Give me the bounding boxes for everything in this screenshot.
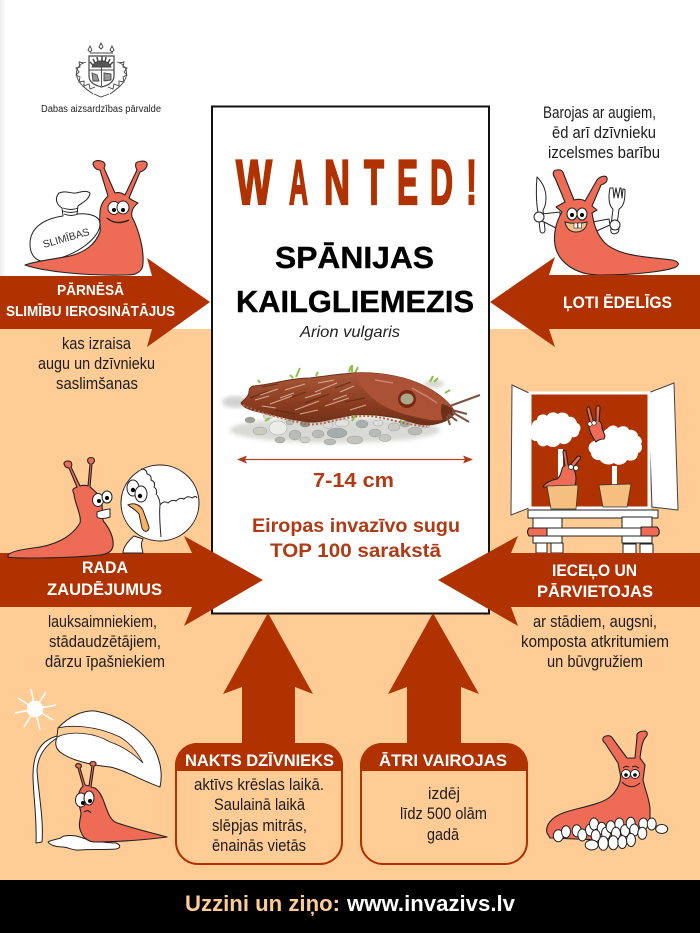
panel: ātri vairojas: gadā xyxy=(427,825,459,844)
arrow: pārnēsā slimību ierosinātājus: SLIMĪBU IEROSINĀTĀJUS xyxy=(6,303,175,320)
heading: species name: KAILGLIEMEZIS xyxy=(236,284,474,319)
text: Europe top 100: Eiropas invazīvo sugu xyxy=(252,516,460,537)
illustration: slug with knife and fork xyxy=(534,170,678,275)
heading: WANTED!: A xyxy=(289,148,308,218)
icon: knife xyxy=(536,177,546,233)
arrow: rada zaudējumus: ZAUDĒJUMUS xyxy=(47,580,162,599)
arrow: pārnēsā slimību ierosinātājus xyxy=(0,258,210,347)
arrow: ieceļo un pārvietojas xyxy=(438,536,700,626)
panel: nakts dzīvnieks: NAKTS DZĪVNIEKS xyxy=(185,751,334,770)
text: barojas ar augiem: ēd arī dzīvnieku xyxy=(552,123,656,142)
text: kas izraisa: saslimšanas xyxy=(56,374,138,393)
text: barojas ar augiem: izcelsmes barību xyxy=(548,143,660,162)
icon: leaf slit xyxy=(57,726,143,763)
panel: ātri vairojas: ĀTRI VAIROJAS xyxy=(379,751,507,770)
arrow: up right xyxy=(388,613,479,745)
panel: nakts dzīvnieks xyxy=(175,743,343,864)
arrow: rada zaudējumus: RADA xyxy=(82,559,128,577)
text: Europe top 100 xyxy=(252,516,460,562)
icon: flower pots xyxy=(547,484,631,509)
illustration: frightened slug and farmer xyxy=(8,458,199,558)
panel: wanted poster xyxy=(212,106,489,614)
text: lauksaimniekiem: dārzu īpašniekiem xyxy=(45,652,165,671)
panel: nakts dzīvnieks: ēnainās vietās xyxy=(212,836,306,855)
text: kas izraisa: augu un dzīvnieku xyxy=(38,354,155,373)
panel: nakts dzīvnieks: slēpjas mitrās, xyxy=(212,816,307,835)
text: lauksaimniekiem: stādaudzētājiem, xyxy=(49,632,161,651)
logo: coat of arms and agency name xyxy=(41,43,161,115)
heading: WANTED!: W xyxy=(236,148,272,218)
illustration: slug photo xyxy=(222,365,480,445)
icon: stem xyxy=(33,736,57,843)
footer bar: Uzzini un ziņo: xyxy=(185,891,340,916)
text: ar stādiem xyxy=(521,612,669,671)
illustration: sun, leaf and hiding slug xyxy=(15,689,167,850)
text: barojas ar augiem xyxy=(543,103,660,162)
icon: upper small slug xyxy=(587,406,605,442)
heading: WANTED!: D xyxy=(430,148,453,218)
text: Europe top 100: TOP 100 sarakstā xyxy=(270,541,441,562)
panel: ātri vairojas: līdz 500 olām xyxy=(400,804,487,823)
heading: WANTED!: ! xyxy=(466,148,477,218)
text: ar stādiem: un būvgružiem xyxy=(547,652,643,671)
arrow: ļoti ēdelīgs: ĻOTI ĒDELĪGS xyxy=(563,293,672,312)
illustration: truck with plants and slugs xyxy=(511,383,678,554)
icon: arms xyxy=(542,212,610,233)
panel: ātri vairojas xyxy=(360,743,528,864)
arrow: up left xyxy=(223,613,313,745)
text: size: 7-14 cm xyxy=(313,470,394,492)
heading: species name: SPĀNIJAS xyxy=(275,240,434,275)
heading: species name xyxy=(236,240,474,319)
panel: nakts dzīvnieks: aktīvs krēslas laikā. xyxy=(194,775,324,794)
text: ar stādiem: komposta atkritumiem xyxy=(521,632,669,651)
panel: ātri vairojas: izdēj xyxy=(428,784,460,803)
heading: WANTED!: T xyxy=(364,148,384,218)
footer bar xyxy=(0,880,700,933)
icon: right tree xyxy=(589,425,642,486)
text: lauksaimniekiem xyxy=(45,612,165,671)
text: ar stādiem: ar stādiem, augsni, xyxy=(533,612,657,631)
logo: coat of arms and agency name: Dabas aizsardzības pārvalde xyxy=(41,104,161,115)
icon: lower small slug xyxy=(543,450,581,488)
arrow: ļoti ēdelīgs xyxy=(490,257,700,347)
icon: leaf xyxy=(56,711,161,787)
icon: left tree xyxy=(529,412,580,487)
arrow: pārnēsā slimību ierosinātājus: PĀRNĒSĀ xyxy=(57,282,124,299)
heading: WANTED!: N xyxy=(324,148,350,218)
text: lauksaimniekiem: lauksaimniekiem, xyxy=(48,612,157,631)
footer bar: www.invazivs.lv xyxy=(346,891,516,916)
text: latin name: Arion vulgaris xyxy=(299,324,400,341)
arrow: ieceļo un pārvietojas: IECEĻO UN xyxy=(552,562,637,580)
text: barojas ar augiem: Barojas ar augiem, xyxy=(543,103,656,122)
icon: puddle xyxy=(48,836,120,850)
text: kas izraisa xyxy=(38,334,155,393)
text: kas izraisa: kas izraisa xyxy=(62,334,131,353)
arrow: size range xyxy=(237,456,473,464)
heading: WANTED! xyxy=(236,148,477,218)
heading: WANTED!: E xyxy=(397,148,418,218)
icon: fork xyxy=(609,188,625,234)
illustration: slug with disease bag xyxy=(25,161,147,275)
panel: nakts dzīvnieks: Saulainā laikā xyxy=(214,795,305,814)
arrow: ieceļo un pārvietojas: PĀRVIETOJAS xyxy=(537,582,653,601)
icon: sun xyxy=(15,689,56,730)
illustration: slug with eggs xyxy=(547,731,668,850)
arrow: rada zaudējumus xyxy=(0,536,263,626)
icon: bag labelled SLIMĪBAS: SLIMĪBAS xyxy=(42,226,91,251)
